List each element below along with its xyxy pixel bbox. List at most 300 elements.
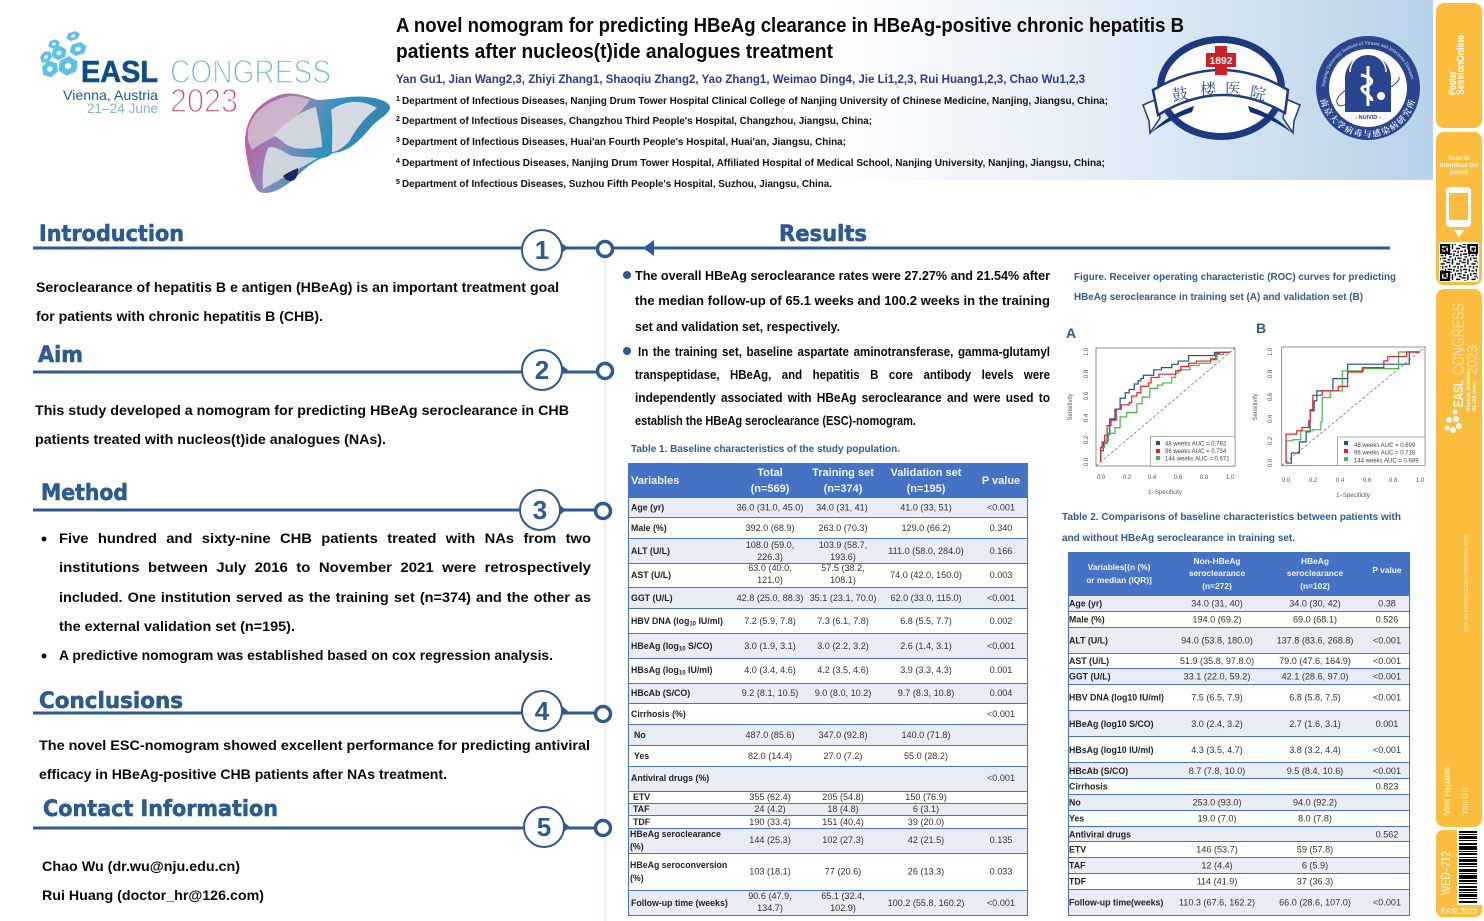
- table 1: 10: [679, 670, 686, 676]
- table 1: 4.2 (3.5, 4.6): [817, 665, 869, 675]
- heading: Aim: [33, 343, 612, 390]
- table 2: 110.3 (67.6, 162.2): [1179, 898, 1255, 908]
- table 1: <0.001: [987, 709, 1015, 719]
- table 1: Yes: [634, 751, 649, 761]
- table 1: 10: [689, 622, 697, 628]
- heading: Method: Method: [41, 481, 128, 506]
- heading: Conclusions: 4: [535, 696, 550, 726]
- caption: table 2: Table 2. Comparisons of baseline characteristics between patients with: [1062, 511, 1401, 523]
- chart: ROC curve A: 0.0: [1084, 457, 1090, 466]
- table 1: Cirrhosis (%): [631, 709, 686, 719]
- chart: ROC curve B: 0.8: [1389, 478, 1398, 484]
- table 2: 3.0 (2.4, 3.2): [1191, 719, 1243, 729]
- table 1: 35.1 (23.1, 70.0): [810, 593, 876, 603]
- logo: Drum Tower Hospital: 1892: [1210, 56, 1233, 67]
- table 2: TDF: [1069, 876, 1087, 886]
- logo: Nanjing University Institute: 南京大学病毒与感染病研究所: [1320, 98, 1416, 138]
- heading: Aim: 2: [535, 355, 549, 385]
- table 1: IU/ml): [696, 616, 723, 626]
- table 1: 42.8 (25.0, 88.3): [737, 593, 803, 603]
- table 2: 79.0 (47.6, 164.9): [1279, 656, 1351, 666]
- table 1: Total: [757, 467, 783, 479]
- text: contact: Rui Huang (doctor_hr@126.com): [42, 887, 264, 903]
- table 1: 3.9 (3.3, 4.3): [900, 665, 952, 675]
- text: method: Five hundred and sixty-nine CHB patients treated with NAs from two: [59, 530, 591, 546]
- icon: EASL hexagons: [38, 30, 88, 80]
- table 1: Antiviral drugs (%): [631, 773, 709, 783]
- table 2: 94.0 (53.8, 180.0): [1181, 636, 1253, 646]
- text: method: included. One institution served as the training set (n=374) and the other as: [59, 589, 591, 605]
- table 1: 487.0 (85.6): [745, 730, 795, 740]
- table 2: 137.8 (83.6, 268.8): [1277, 636, 1353, 646]
- table 1: 0.003: [990, 570, 1012, 580]
- table 2: 0.38: [1378, 598, 1396, 608]
- EASL Congress logo: 21–24 June: [87, 100, 158, 116]
- EASL Congress logo: [38, 30, 331, 119]
- text: results: transpeptidase, HBeAg, and hepatitis B core antibody levels were: [635, 368, 1050, 382]
- table 2: 253.0 (93.0): [1192, 798, 1242, 808]
- chart: ROC curve B: 0.6: [1363, 478, 1372, 484]
- table 1: 57.5 (38.2,: [821, 563, 865, 573]
- logo: Drum Tower Hospital: 院: [1248, 80, 1268, 105]
- logo: Drum Tower Hospital: THE AFFILIATED DRUM TOWER HOSPITAL OF: [1169, 47, 1258, 80]
- table 1: <0.001: [987, 898, 1015, 908]
- heading: Conclusions: Conclusions: [39, 689, 183, 714]
- table 2: ETV: [1069, 844, 1086, 854]
- table 1: <0.001: [987, 773, 1015, 783]
- table 1: 103.9 (58.7,: [819, 540, 867, 550]
- EASL Congress logo: Vienna, Austria: [63, 87, 158, 103]
- table 1: 18 (4.8): [827, 804, 859, 814]
- table 2: 51.9 (35.8, 97.8.0): [1180, 656, 1254, 666]
- table 2: Non-HBeAg: [1194, 556, 1240, 566]
- text: method: the external validation set (n=195).: [59, 618, 295, 634]
- table 2: GGT (U/L): [1069, 672, 1111, 682]
- table 2: 0.823: [1376, 782, 1398, 792]
- table 1: 41.0 (33, 51): [900, 502, 952, 512]
- text: conclusions: efficacy in HBeAg-positive CHB patients after NAs treatment.: [39, 766, 447, 782]
- table 1: No: [634, 730, 646, 740]
- chart: ROC curve B: 144 weeks AUC = 0.689: [1354, 458, 1419, 464]
- table 2: Male (%): [1069, 614, 1105, 624]
- text: method: [42, 530, 591, 663]
- EASL Congress logo: 2023: [170, 82, 238, 119]
- chart: ROC curve A: A: [1066, 325, 1076, 341]
- table 2: 37 (36.3): [1297, 876, 1333, 886]
- table 2: (n=272): [1202, 581, 1232, 591]
- table 2: 2.7 (1.6, 3.1): [1289, 719, 1341, 729]
- table 1: 103 (18.1): [749, 866, 791, 876]
- table 1: HBV DNA (log: [631, 616, 689, 626]
- table 2: <0.001: [1373, 898, 1401, 908]
- table 1: ETV: [633, 792, 650, 802]
- table 1: 263.0 (70.3): [818, 523, 868, 533]
- table 1: <0.001: [987, 641, 1015, 651]
- table 2: 0.001: [1376, 719, 1398, 729]
- authors: Yan Gu1, Jian Wang2,3, Zhiyi Zhang1, Shaoqiu Zhang2, Yao Zhang1, Weimao Ding4, Jie Li1,2,3, Rui Huang1,2,3, Chao Wu1,2,3: [396, 74, 1085, 86]
- chart: ROC curve B: 0.2: [1268, 436, 1274, 445]
- table 1: Age (yr): [631, 502, 664, 512]
- table 1: 26 (13.3): [908, 866, 944, 876]
- table 1: 102 (27.3): [822, 835, 864, 845]
- table 2: Follow-up time(weeks): [1069, 898, 1163, 908]
- table 1: 65.1 (32.4,: [821, 891, 865, 901]
- sidebar panel: congress info: Vienna, Austria: [1466, 370, 1472, 411]
- table 1: 140.0 (71.8): [901, 730, 951, 740]
- affiliations: 3: [396, 137, 400, 144]
- table 2: AST (U/L): [1069, 656, 1109, 666]
- table 1: 111.0 (58.0, 284.0): [888, 546, 964, 556]
- table 1: 27.0 (7.2): [824, 751, 862, 761]
- table 1: 82.0 (14.4): [748, 751, 792, 761]
- chart: ROC curve A: 0.2: [1084, 435, 1090, 444]
- table 2: (n=102): [1300, 581, 1330, 591]
- affiliations: 2: [396, 116, 400, 123]
- text: results: set and validation set, respectively.: [635, 320, 840, 334]
- sidebar panel: QR code: poster: [1450, 170, 1469, 176]
- table 1: 6 (3.1): [913, 804, 939, 814]
- table 2: <0.001: [1373, 745, 1401, 755]
- table 2: 34.0 (31, 40): [1191, 598, 1243, 608]
- sidebar panel: Poster Session Online: [1436, 3, 1482, 128]
- table 2: Yes: [1069, 814, 1084, 824]
- heading: Contact Information: 5: [537, 812, 551, 842]
- affiliations: [396, 95, 1108, 190]
- table 1: 150 (76.9): [905, 792, 947, 802]
- table 1: 0.166: [990, 546, 1012, 556]
- table 1: 205 (54.8): [822, 792, 864, 802]
- chart: ROC curve A: 144 weeks AUC = 0.671: [1165, 456, 1230, 462]
- chart: ROC curve B: 0.4: [1268, 414, 1274, 423]
- table 2: 94.0 (92.2): [1293, 798, 1337, 808]
- chart: ROC curve A: [1066, 325, 1235, 496]
- icon: phone: [1446, 187, 1471, 237]
- heading: Conclusions: [33, 689, 610, 731]
- heading: Method: [33, 481, 610, 530]
- table 1: 0.033: [990, 866, 1012, 876]
- vertical connector: [604, 258, 606, 921]
- table 1: HBeAg (log: [631, 641, 679, 651]
- table 1: 144 (25.3): [749, 835, 791, 845]
- chart: ROC curve A: 0.0: [1097, 475, 1106, 481]
- table 1: Male (%): [631, 523, 667, 533]
- chart: ROC curve A: 0.4: [1148, 475, 1157, 481]
- table 1: 42 (21.5): [908, 835, 944, 845]
- table 2: <0.001: [1373, 692, 1401, 702]
- chart: ROC curve A: 0.8: [1084, 369, 1090, 378]
- chart: ROC curve B: [1253, 320, 1425, 499]
- title: A novel nomogram for predicting HBeAg clearance in HBeAg-positive chronic hepatitis B: [396, 14, 1184, 37]
- table 2: ALT (U/L): [1069, 636, 1108, 646]
- chart: ROC curve B: 0.0: [1282, 478, 1291, 484]
- text: contact: Chao Wu (dr.wu@nju.edu.cn): [42, 858, 240, 874]
- table 1: 74.0 (42.0, 150.0): [890, 570, 962, 580]
- sidebar panel: congress info: 2023: [1464, 345, 1481, 375]
- table 1: 77 (20.6): [825, 866, 861, 876]
- table 1: 102.9): [830, 903, 856, 913]
- table 1: 9.0 (8.0, 10.2): [815, 688, 871, 698]
- table 1: Variables: [631, 475, 679, 487]
- logo: Nanjing University Institute: [1316, 36, 1420, 140]
- sidebar panel: QR code: [1436, 132, 1482, 285]
- table 1: (n=374): [824, 483, 863, 495]
- table 1: 4.0 (3.4, 4.6): [744, 665, 796, 675]
- text: contact: [42, 858, 264, 903]
- sidebar panel: Poster Session Online: Poster: [1447, 71, 1459, 95]
- heading: Introduction: 1: [535, 235, 549, 265]
- caption: table 2: [1062, 511, 1401, 544]
- QR code: [1439, 242, 1479, 282]
- table 1: 6.8 (5.5, 7.7): [900, 616, 952, 626]
- text: results: In the training set, baseline aspartate aminotransferase, gamma-glutamyl: [638, 345, 1050, 359]
- title: [396, 14, 1184, 63]
- heading: Introduction: [33, 222, 612, 270]
- table 2: 59 (57.8): [1297, 844, 1333, 854]
- table 1: HBeAg seroconversion: [630, 860, 727, 870]
- affiliations: Department of Infectious Diseases, Suzhou Fifth People's Hospital, Suzhou, Jiangsu, China.: [402, 178, 832, 190]
- chart: ROC curve A: 1.0: [1084, 347, 1090, 356]
- table 1: TAF: [633, 804, 650, 814]
- chart: ROC curve A: Sensitivity: [1068, 393, 1074, 421]
- chart: ROC curve B: B: [1256, 320, 1266, 336]
- table 2: <0.001: [1373, 766, 1401, 776]
- text: introduction: for patients with chronic hepatitis B (CHB).: [36, 308, 323, 324]
- affiliations: Department of Infectious Diseases, Nanjing Drum Tower Hospital Clinical College of Nanjing University of Chinese Medicine, Nanjing, Jiangsu, China;: [402, 95, 1108, 107]
- table 1: 355 (62.4): [749, 792, 791, 802]
- table 2: 9.5 (8.4, 10.6): [1287, 766, 1343, 776]
- table 2: No: [1069, 798, 1081, 808]
- text: conclusions: The novel ESC-nomogram showed excellent performance for predicting antiviral: [39, 737, 590, 753]
- caption: figure: [1074, 271, 1396, 303]
- heading: Contact Information: Contact Information: [43, 797, 278, 822]
- heading: Results: Results: [779, 222, 867, 247]
- table 1: 0.135: [990, 835, 1012, 845]
- sidebar panel: Poster Session Online: SessionOnline: [1455, 35, 1467, 95]
- logo: Drum Tower Hospital: 鼓: [1170, 81, 1190, 106]
- table 2: or median (IQR)]: [1086, 575, 1152, 585]
- chart: ROC curve B: 96 weeks AUC = 0.718: [1354, 450, 1416, 456]
- table 1: (%): [630, 842, 644, 852]
- chart: ROC curve B: 0.2: [1309, 478, 1318, 484]
- affiliations: Department of Infectious Diseases, Nanjing Drum Tower Hospital, Affiliated Hospital of Medical School, Nanjing University, Nanjing, Jiangsu, China;: [402, 157, 1105, 169]
- heading: Results: [613, 222, 1390, 256]
- chart: ROC curve A: 0.2: [1123, 475, 1132, 481]
- sidebar panel: congress info: EASL: [1450, 380, 1466, 407]
- icon: liver illustration: [245, 94, 390, 193]
- table 1: 90.6 (47.9,: [748, 891, 792, 901]
- table 1: 9.7 (8.3, 10.8): [898, 688, 954, 698]
- table 1: 7.2 (5.9, 7.8): [744, 616, 796, 626]
- table 2: 194.0 (69.2): [1192, 614, 1242, 624]
- table 1: 24 (4.2): [754, 804, 786, 814]
- table 2: seroclearance: [1189, 568, 1246, 578]
- table 2: P value: [1372, 565, 1402, 575]
- chart: ROC curve B: 0.0: [1268, 458, 1274, 467]
- chart: ROC curve B: 0.8: [1268, 369, 1274, 378]
- table 1: 34.0 (31, 41): [816, 502, 868, 512]
- table 1: ALT (U/L): [631, 546, 670, 556]
- text: aim: [35, 402, 569, 447]
- table 1: <0.001: [987, 593, 1015, 603]
- EASL Congress logo: CONGRESS: [170, 53, 331, 90]
- logo: Drum Tower Hospital: 医: [1225, 77, 1241, 100]
- table 2: 12 (4.4): [1201, 860, 1233, 870]
- table 2: 0.526: [1376, 614, 1398, 624]
- table 1: GGT (U/L): [631, 593, 673, 603]
- table 1: 121.0): [757, 575, 783, 585]
- table 1: 129.0 (66.2): [901, 523, 951, 533]
- table 1: 62.0 (33.0, 115.0): [890, 593, 962, 603]
- table 1: Validation set: [891, 467, 962, 479]
- table 2: Age (yr): [1069, 598, 1102, 608]
- affiliations: 5: [396, 179, 400, 186]
- table 1: S/CO): [686, 641, 713, 651]
- text: method: institutions between July 2016 to November 2021 were retrospectively: [59, 559, 591, 575]
- table 1: Follow-up time (weeks): [631, 898, 728, 908]
- table 1: 0.001: [990, 665, 1012, 675]
- table 2: HBV DNA (log10 IU/ml): [1069, 692, 1164, 702]
- table 2: 6 (5.9): [1302, 860, 1328, 870]
- sidebar panel: poster number and barcode: [1436, 830, 1482, 917]
- sidebar panel: congress info: [1436, 289, 1482, 827]
- caption: figure: Figure. Receiver operating characteristic (ROC) curves for predicting: [1074, 271, 1396, 283]
- chart: ROC curve B: 48 weeks AUC = 0.699: [1354, 443, 1416, 449]
- chart: ROC curve A: 0.6: [1084, 391, 1090, 400]
- table 2: HBsAg (log10 IU/ml): [1069, 745, 1154, 755]
- sidebar panel: congress info: Yan Gu: [1460, 788, 1470, 815]
- table 1: 39 (20.0): [908, 817, 944, 827]
- EASL Congress logo: EASL: [81, 54, 158, 89]
- table 2: <0.001: [1373, 636, 1401, 646]
- sidebar panel: QR code: Scan to: [1448, 156, 1470, 162]
- table 1: 392.0 (68.9): [745, 523, 795, 533]
- table 2: TAF: [1069, 860, 1086, 870]
- logo: Drum Tower Hospital: [1142, 36, 1301, 140]
- table 2: 19.0 (7.0): [1198, 814, 1236, 824]
- table 2: 3.8 (3.2, 4.4): [1289, 745, 1341, 755]
- table 1: <0.001: [987, 502, 1015, 512]
- text: aim: This study developed a nomogram for predicting HBeAg seroclearance in CHB: [35, 402, 569, 418]
- table 2: 69.0 (68.1): [1293, 614, 1337, 624]
- table 1: 0.004: [990, 688, 1012, 698]
- heading: Contact Information: [33, 797, 610, 847]
- table 2: 7.5 (6.5, 7.9): [1191, 692, 1243, 702]
- logo: Nanjing University Institute: - NUIVID -: [1355, 115, 1381, 121]
- affiliations: Department of Infectious Diseases, Changzhou Third People's Hospital, Changzhou, Jiangsu, China;: [402, 115, 872, 127]
- table 1: HBeAg seroclearance: [630, 829, 721, 839]
- heading: Introduction: Introduction: [39, 222, 184, 247]
- table 1: 55.0 (28.2): [904, 751, 948, 761]
- table 1: 10: [679, 646, 686, 652]
- chart: ROC curve B: Sensitivity: [1253, 393, 1259, 421]
- table 1: 9.2 (8.1, 10.5): [742, 688, 798, 698]
- table 2: Antiviral drugs: [1069, 830, 1131, 840]
- text: results: establish the HBeAg seroclearance (ESC)-nomogram.: [635, 414, 916, 428]
- table 1: 226.3): [757, 552, 783, 562]
- table 1: 63.0 (40.0,: [748, 563, 792, 573]
- table 1: 193.6): [830, 552, 856, 562]
- logo: Nanjing University Institute: Nanjing University Institute of Viruses and Infectious Diseases: [1322, 41, 1414, 87]
- table 1: HBcAb (S/CO): [631, 688, 690, 698]
- table 1: 3.0 (2.2, 3.2): [817, 641, 869, 651]
- affiliations: 1: [396, 96, 400, 103]
- table 2: 0.562: [1376, 830, 1398, 840]
- table 1: (n=569): [751, 483, 790, 495]
- table 2: 33.1 (22.0, 59.2): [1184, 672, 1250, 682]
- table 1: [628, 463, 1028, 916]
- chart: ROC curve A: 0.6: [1174, 475, 1183, 481]
- chart: ROC curve A: 96 weeks AUC = 0.734: [1165, 449, 1227, 455]
- table 2: HBeAg: [1301, 556, 1329, 566]
- heading: Method: 3: [533, 495, 547, 525]
- affiliations: Department of Infectious Diseases, Huai'an Fourth People's Hospital, Huai'an, Jiangsu, China;: [402, 136, 846, 148]
- chart: ROC curve B: 1.0: [1268, 347, 1274, 356]
- table 1: Training set: [812, 467, 874, 479]
- table 2: 8.0 (7.8): [1298, 814, 1332, 824]
- table 1: 151 (40.4): [822, 817, 864, 827]
- chart: ROC curve B: 0.4: [1336, 478, 1345, 484]
- table 2: HBeAg (log10 S/CO): [1069, 719, 1154, 729]
- text: results: [623, 269, 1050, 428]
- table 2: 42.1 (28.6, 97.0): [1282, 672, 1348, 682]
- text: introduction: [36, 279, 559, 324]
- table 2: HBcAb (S/CO): [1069, 766, 1128, 776]
- table 2: <0.001: [1373, 656, 1401, 666]
- table 1: 108.1): [830, 575, 856, 585]
- table 1: 347.0 (92.8): [818, 730, 868, 740]
- chart: ROC curve A: 1−Specificity: [1148, 490, 1182, 496]
- affiliations: 4: [396, 158, 400, 165]
- table 1: IU/ml): [686, 665, 713, 675]
- text: conclusions: [39, 737, 590, 782]
- logo: Drum Tower Hospital: 楼: [1200, 77, 1217, 100]
- table 1: 0.002: [990, 616, 1012, 626]
- icon: hexagons: [1444, 410, 1462, 433]
- table 1: 100.2 (55.8, 160.2): [888, 898, 964, 908]
- caption: figure: HBeAg seroclearance in training set (A) and validation set (B): [1074, 291, 1363, 303]
- text: introduction: Seroclearance of hepatitis B e antigen (HBeAg) is an important treatment goal: [36, 279, 559, 295]
- chart: ROC curve B: 1−Specificity: [1336, 493, 1370, 499]
- text: results: independently associated with HBeAg seroclearance and were used to: [635, 391, 1050, 405]
- table 2: 8.7 (7.8, 10.0): [1189, 766, 1245, 776]
- sidebar panel: QR code: download the: [1440, 163, 1479, 169]
- table 2: 114 (41.9): [1197, 876, 1237, 886]
- chart: ROC curve B: 1.0: [1416, 478, 1425, 484]
- chart: ROC curve B: 0.6: [1268, 392, 1274, 401]
- table 1: (%): [630, 873, 644, 883]
- table 2: 4.3 (3.5, 4.7): [1191, 745, 1243, 755]
- table 1: (n=195): [907, 483, 946, 495]
- text: results: The overall HBeAg seroclearance rates were 27.27% and 21.54% after: [635, 269, 1050, 283]
- table 1: 190 (33.4): [749, 817, 791, 827]
- text: aim: patients treated with nucleos(t)ide analogues (NAs).: [35, 431, 386, 447]
- table 2: 34.0 (30, 42): [1289, 598, 1341, 608]
- table 2: [1068, 552, 1410, 916]
- table 2: 146 (53.7): [1196, 844, 1238, 854]
- table 2: 6.8 (5.8, 7.5): [1289, 692, 1341, 702]
- sidebar panel: congress info: 21–24 June: [1472, 381, 1478, 411]
- sidebar panel: congress info: DOI: 10.26226/m.EASLCONGRESS.2023: [1464, 535, 1470, 632]
- table 1: 7.3 (6.1, 7.8): [817, 616, 869, 626]
- sidebar panel: congress info: CONGRESS: [1449, 303, 1468, 375]
- table 1: 134.7): [757, 903, 783, 913]
- caption: table 1: Table 1. Baseline characteristics of the study population.: [631, 443, 900, 455]
- header gradient band: [390, 0, 1433, 180]
- title: patients after nucleos(t)ide analogues treatment: [396, 40, 833, 63]
- sidebar panel: congress info: Viral Hepatitis: [1442, 765, 1452, 815]
- text: results: the median follow-up of 65.1 weeks and 100.2 weeks in the training: [635, 294, 1050, 308]
- sidebar panel: poster number and barcode: EASL2023: [1441, 907, 1478, 916]
